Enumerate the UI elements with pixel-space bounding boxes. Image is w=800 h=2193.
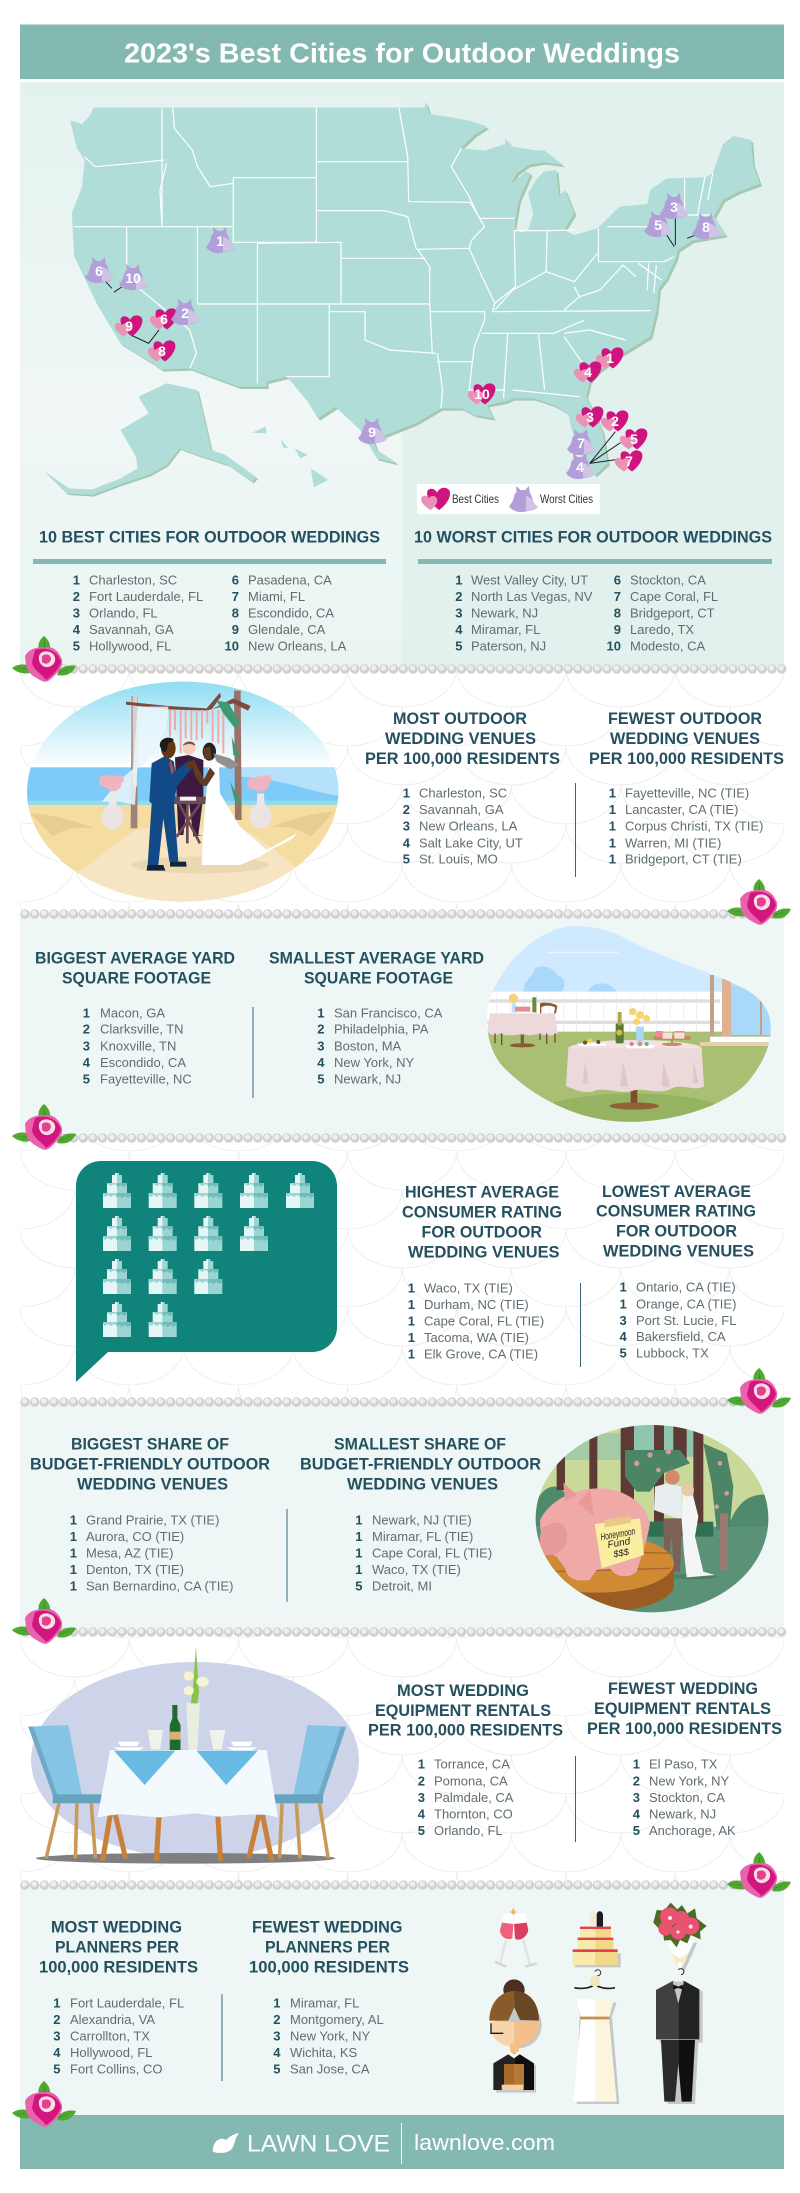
heading: most rentals: PER 100,000 RESIDENTS (368, 1722, 563, 1740)
list: highest rating: 1 (408, 1297, 415, 1312)
list: smallest budget share: 5 (355, 1579, 362, 1594)
map markers: best cities: 8 (158, 343, 166, 359)
list: 10 best cities: Orlando, FL (89, 606, 158, 621)
map markers: worst cities: 4 (576, 459, 584, 475)
list: 10 worst cities: North Las Vegas, NV (471, 589, 593, 604)
list: biggest yard: 1 (83, 1005, 90, 1020)
panel: yard section background (20, 914, 784, 1138)
list: most planners: Alexandria, VA (70, 2012, 155, 2027)
map markers: worst cities (85, 193, 721, 479)
list: smallest yard: New York, NY (334, 1055, 415, 1070)
heading: smallest yard (269, 949, 484, 987)
flower decoration 1 (12, 636, 76, 682)
list: most outdoor venues: 5 (403, 852, 410, 867)
map legend: Best Cities (452, 492, 499, 506)
heading: fewest planners (249, 1919, 409, 1977)
heading: fewest planners: FEWEST WEDDING (252, 1919, 402, 1937)
list: fewest rentals: Stockton, CA (649, 1790, 725, 1805)
connector lines (104, 217, 700, 463)
list: lowest rating: 3 (619, 1313, 627, 1328)
map markers: best cities: 1 (606, 350, 614, 366)
heading: smallest yard: SMALLEST AVERAGE YARD (269, 949, 484, 967)
list: biggest budget share: 1 (70, 1562, 77, 1577)
heading: smallest budget share: BUDGET-FRIENDLY OUTDOOR (300, 1456, 541, 1474)
icon: wedding cake (573, 1911, 621, 1967)
list: fewest planners: Miramar, FL (290, 1995, 359, 2010)
footer banner: lawnlove.com (414, 2130, 555, 2155)
list: most planners: Carrollton, TX (70, 2028, 150, 2043)
list: highest rating: Durham, NC (TIE) (424, 1297, 529, 1312)
list: fewest outdoor venues: 1 (609, 835, 616, 850)
list: most outdoor venues: 1 (403, 786, 410, 801)
icons: wedding planner items (489, 1903, 707, 2104)
heading: lowest rating: LOWEST AVERAGE (602, 1183, 751, 1201)
list: fewest planners: Wichita, KS (290, 2045, 358, 2060)
list: 10 worst cities: 7 (614, 589, 621, 604)
list: biggest yard: 4 (83, 1055, 91, 1070)
heading: fewest rentals (587, 1680, 782, 1738)
list: most outdoor venues: Savannah, GA (419, 802, 504, 817)
list: 10 worst cities: 3 (455, 606, 462, 621)
list: most outdoor venues: 4 (403, 835, 411, 850)
list: most outdoor venues: Charleston, SC (419, 786, 507, 801)
flower decoration 6 (727, 1852, 791, 1898)
map markers: worst cities: 1 (216, 233, 224, 249)
illustration: piggy bank honeymoon fund (536, 1425, 768, 1612)
heading: biggest budget share: WEDDING VENUES (77, 1475, 228, 1493)
heading: biggest budget share: BIGGEST SHARE OF (71, 1436, 229, 1454)
list: biggest budget share: Aurora, CO (TIE) (86, 1529, 184, 1544)
icon: wedding officiant (489, 1979, 542, 2093)
list: biggest yard: Clarksville, TN (100, 1022, 184, 1037)
list: 10 best cities: 5 (73, 639, 80, 654)
list: most rentals: Orlando, FL (434, 1823, 503, 1838)
list: most rentals (418, 1757, 514, 1838)
list: most outdoor venues: New Orleans, LA (419, 819, 518, 834)
map legend: Worst Cities (540, 492, 593, 506)
map markers: worst cities: 6 (95, 263, 103, 279)
list: lowest rating (580, 1280, 736, 1367)
list: 10 best cities: Hollywood, FL (89, 639, 171, 654)
list: fewest rentals: Anchorage, AK (649, 1823, 736, 1838)
heading: fewest planners: 100,000 RESIDENTS (249, 1959, 409, 1977)
heading: most outdoor venues: WEDDING VENUES (385, 730, 536, 748)
list: smallest yard: 1 (317, 1005, 324, 1020)
list: 10 worst cities: Miramar, FL (471, 622, 540, 637)
flower decoration 4 (727, 1368, 791, 1414)
list: smallest yard: Boston, MA (334, 1038, 402, 1053)
list: 10 best cities: Savannah, GA (89, 622, 174, 637)
heading: fewest rentals: EQUIPMENT RENTALS (594, 1700, 771, 1718)
list: lowest rating: 1 (619, 1296, 627, 1311)
list: 10 worst cities (455, 572, 718, 654)
list: fewest planners: 4 (273, 2045, 281, 2060)
list: smallest budget share: 1 (355, 1546, 362, 1561)
list: fewest outdoor venues: Lancaster, CA (TIE) (625, 802, 738, 817)
heading: lowest rating: FOR OUTDOOR (616, 1223, 737, 1241)
footer banner: LAWN LOVE (247, 2131, 390, 2158)
list: 10 worst cities: Newark, NJ (471, 606, 538, 621)
map markers: worst cities: 9 (368, 424, 376, 440)
list: 10 best cities: Fort Lauderdale, FL (89, 589, 203, 604)
list: 10 best cities: 10 (225, 639, 239, 654)
heading: biggest yard (35, 949, 235, 987)
list: smallest budget share: Newark, NJ (TIE) (372, 1512, 472, 1527)
list: smallest yard: San Francisco, CA (334, 1005, 443, 1020)
heading: fewest outdoor venues (589, 710, 784, 768)
list: biggest yard: 2 (83, 1022, 90, 1037)
heading: smallest budget share: WEDDING VENUES (347, 1475, 498, 1493)
list: smallest budget share: Waco, TX (TIE) (372, 1562, 461, 1577)
icon: champagne glasses (495, 1907, 537, 1967)
speech bubble with cake pictogram (76, 1161, 337, 1382)
list: 10 worst cities: 5 (455, 639, 462, 654)
map markers: worst cities: 2 (181, 305, 189, 321)
map markers: best cities (115, 308, 647, 472)
list: most planners: Fort Collins, CO (70, 2061, 162, 2076)
list: fewest planners: New York, NY (290, 2028, 371, 2043)
list: fewest outdoor venues: Warren, MI (TIE) (625, 835, 721, 850)
list: highest rating: 1 (408, 1347, 415, 1362)
illustration: piggy bank honeymoon fund: Honeymoon (600, 1526, 636, 1543)
list: highest rating: Tacoma, WA (TIE) (424, 1330, 529, 1345)
list: smallest yard: 3 (317, 1038, 324, 1053)
list: lowest rating: Port St. Lucie, FL (636, 1313, 736, 1328)
list: most outdoor venues: 3 (403, 819, 410, 834)
list: fewest rentals: El Paso, TX (649, 1757, 718, 1772)
heading: lowest rating (596, 1183, 756, 1261)
list: biggest yard: Macon, GA (100, 1005, 165, 1020)
panel: scallop background rentals (20, 1632, 784, 1885)
map markers: worst cities: 7 (577, 435, 585, 451)
title banner: 2023's Best Cities for Outdoor Weddings (124, 38, 680, 68)
flower decoration 3 (12, 1104, 76, 1150)
heading: smallest yard: SQUARE FOOTAGE (304, 969, 453, 987)
map markers: best cities: 4 (584, 364, 592, 380)
list: biggest budget share: Mesa, AZ (TIE) (86, 1546, 173, 1561)
list: lowest rating: Ontario, CA (TIE) (636, 1280, 736, 1295)
heading: lowest rating: WEDDING VENUES (603, 1243, 754, 1261)
heading: fewest outdoor venues: WEDDING VENUES (610, 730, 760, 748)
list: 10 best cities (73, 572, 347, 654)
list: smallest budget share: Detroit, MI (372, 1579, 432, 1594)
list: biggest yard (83, 1005, 192, 1086)
list: highest rating: 1 (408, 1280, 415, 1295)
list: biggest budget share: 1 (70, 1529, 77, 1544)
list: lowest rating: Bakersfield, CA (636, 1329, 726, 1344)
list: most outdoor venues: St. Louis, MO (419, 852, 498, 867)
map markers: best cities: 10 (474, 386, 490, 402)
list: fewest outdoor venues: 1 (609, 819, 616, 834)
list: lowest rating: 4 (619, 1329, 627, 1344)
list: lowest rating: 5 (619, 1346, 627, 1361)
map markers: worst cities: 5 (654, 217, 662, 233)
list: 10 best cities: Pasadena, CA (248, 572, 332, 587)
list: 10 worst cities: Modesto, CA (630, 639, 705, 654)
list: fewest rentals: 1 (633, 1757, 640, 1772)
list: most planners: 2 (53, 2012, 60, 2027)
heading: fewest outdoor venues: PER 100,000 RESIDENTS (589, 750, 784, 768)
list: highest rating: Waco, TX (TIE) (424, 1280, 513, 1295)
icon: bouquet (653, 1903, 707, 1973)
icon: wedding dress (573, 1970, 619, 2104)
map markers: best cities: 9 (125, 318, 133, 334)
list: most rentals: Thornton, CO (434, 1806, 513, 1821)
list: most outdoor venues: 2 (403, 802, 410, 817)
heading: biggest budget share: BUDGET-FRIENDLY OUTDOOR (30, 1456, 270, 1474)
list: smallest budget share (287, 1509, 492, 1602)
map markers: best cities: 3 (586, 409, 594, 425)
list: fewest outdoor venues: Bridgeport, CT (TIE) (625, 852, 742, 867)
list: smallest yard (253, 1005, 443, 1098)
list: fewest rentals: New York, NY (649, 1773, 730, 1788)
list: biggest budget share: 1 (70, 1546, 77, 1561)
list: lowest rating: 1 (619, 1280, 627, 1295)
panel: scallop background ratings (20, 1138, 784, 1402)
panel: map background (20, 82, 784, 669)
list: most outdoor venues: Salt Lake City, UT (419, 835, 523, 850)
panel: planners section background (20, 1885, 784, 2115)
list: 10 worst cities: 10 (607, 639, 621, 654)
list: most rentals: 2 (418, 1773, 425, 1788)
heading: highest rating: WEDDING VENUES (408, 1243, 560, 1261)
footer banner (20, 2115, 784, 2169)
list: 10 best cities: New Orleans, LA (248, 639, 347, 654)
list: lowest rating: Orange, CA (TIE) (636, 1296, 736, 1311)
list: fewest outdoor venues: 1 (609, 786, 616, 801)
heading: 10 best cities: 10 BEST CITIES FOR OUTDOOR WEDDINGS (39, 528, 380, 546)
list: most planners: Hollywood, FL (70, 2045, 152, 2060)
list: 10 best cities: Glendale, CA (248, 622, 326, 637)
list: lowest rating: Lubbock, TX (636, 1346, 709, 1361)
list: 10 worst cities: West Valley City, UT (471, 572, 588, 587)
list: highest rating: Cape Coral, FL (TIE) (424, 1314, 544, 1329)
list: biggest yard: Escondido, CA (100, 1055, 186, 1070)
list: 10 best cities: 9 (232, 622, 239, 637)
heading: 10 best cities (33, 528, 386, 564)
list: 10 worst cities: 9 (614, 622, 621, 637)
list: smallest budget share: 1 (355, 1512, 362, 1527)
list: biggest yard: Fayetteville, NC (100, 1071, 192, 1086)
illustration: wedding table with chairs (28, 1647, 359, 1864)
list: biggest budget share: 1 (70, 1579, 77, 1594)
list: highest rating: 1 (408, 1330, 415, 1345)
list: most rentals: 3 (418, 1790, 425, 1805)
list: highest rating: Elk Grove, CA (TIE) (424, 1347, 538, 1362)
list: biggest budget share: San Bernardino, CA (TIE) (86, 1579, 233, 1594)
heading: most rentals: EQUIPMENT RENTALS (375, 1702, 551, 1720)
list: biggest yard: Knoxville, TN (100, 1038, 176, 1053)
list: most planners (53, 1995, 184, 2076)
list: smallest yard: 4 (317, 1055, 325, 1070)
list: fewest planners: 5 (273, 2061, 280, 2076)
illustration: piggy bank honeymoon fund: Fund (607, 1536, 631, 1551)
list: smallest yard: Philadelphia, PA (334, 1022, 429, 1037)
list: fewest rentals: 2 (633, 1773, 640, 1788)
heading: most outdoor venues: PER 100,000 RESIDENTS (365, 750, 560, 768)
list: smallest budget share: 1 (355, 1562, 362, 1577)
list: biggest yard: 5 (83, 1071, 90, 1086)
list: most rentals: Torrance, CA (434, 1757, 510, 1772)
list: biggest budget share (70, 1512, 233, 1594)
list: 10 worst cities: 6 (614, 572, 621, 587)
heading: 10 worst cities (414, 528, 772, 564)
list: biggest budget share: 1 (70, 1512, 77, 1527)
list: fewest planners: 1 (273, 1995, 280, 2010)
list: 10 worst cities: Stockton, CA (630, 572, 706, 587)
list: fewest outdoor venues: 1 (609, 852, 616, 867)
illustration: beach wedding ceremony (20, 680, 350, 907)
list: fewest rentals: 4 (633, 1806, 641, 1821)
illustration: backyard reception (487, 926, 771, 1122)
list: 10 best cities: 3 (73, 606, 80, 621)
map markers: worst cities: 8 (702, 219, 710, 235)
list: biggest budget share: Grand Prairie, TX (TIE) (86, 1512, 219, 1527)
icon: tuxedo (656, 1969, 703, 2104)
flower decoration 7 (12, 2081, 76, 2127)
list: most planners: Fort Lauderdale, FL (70, 1995, 184, 2010)
list: fewest planners (222, 1994, 384, 2081)
map markers: best cities: 7 (625, 453, 633, 469)
list: 10 best cities: 4 (73, 622, 81, 637)
heading: most planners: MOST WEDDING (51, 1919, 182, 1937)
heading: highest rating (402, 1184, 562, 1261)
list: 10 worst cities: 1 (455, 572, 462, 587)
heading: most planners: PLANNERS PER (55, 1939, 179, 1957)
heading: most outdoor venues: MOST OUTDOOR (393, 710, 527, 728)
heading: 10 worst cities: 10 WORST CITIES FOR OUTDOOR WEDDINGS (414, 528, 772, 546)
list: fewest outdoor venues (576, 783, 763, 877)
heading: fewest planners: PLANNERS PER (265, 1939, 390, 1957)
list: highest rating: 1 (408, 1314, 415, 1329)
heading: smallest budget share (300, 1436, 541, 1493)
list: most planners: 3 (53, 2028, 60, 2043)
list: smallest yard: Newark, NJ (334, 1071, 401, 1086)
list: 10 worst cities: Cape Coral, FL (630, 589, 718, 604)
pearl string dividers (24, 668, 784, 1885)
list: 10 worst cities: 4 (455, 622, 463, 637)
heading: most planners (39, 1919, 198, 1977)
list: 10 worst cities: Bridgeport, CT (630, 606, 715, 621)
list: 10 best cities: Miami, FL (248, 589, 305, 604)
heading: highest rating: FOR OUTDOOR (422, 1223, 542, 1241)
title banner (20, 24, 784, 79)
list: fewest rentals: 3 (633, 1790, 640, 1805)
flower decoration 5 (12, 1598, 76, 1644)
list: smallest yard: 2 (317, 1022, 324, 1037)
list: 10 best cities: 6 (232, 572, 239, 587)
list: smallest budget share: Cape Coral, FL (TIE) (372, 1546, 492, 1561)
list: fewest planners: San Jose, CA (290, 2061, 370, 2076)
list: smallest yard: 5 (317, 1071, 324, 1086)
panel: budget section background (20, 1402, 784, 1632)
heading: fewest outdoor venues: FEWEST OUTDOOR (608, 710, 762, 728)
list: most rentals: 5 (418, 1823, 425, 1838)
list: most rentals: 4 (418, 1806, 426, 1821)
list: fewest outdoor venues: Fayetteville, NC (TIE) (625, 786, 749, 801)
list: most planners: 5 (53, 2061, 60, 2076)
heading: smallest budget share: SMALLEST SHARE OF (334, 1436, 506, 1454)
list: 10 worst cities: Paterson, NJ (471, 639, 546, 654)
list: most rentals: Palmdale, CA (434, 1790, 514, 1805)
flower decoration 2 (727, 879, 791, 925)
heading: most planners: 100,000 RESIDENTS (39, 1959, 198, 1977)
heading: most outdoor venues (365, 710, 560, 768)
list: fewest outdoor venues: 1 (609, 802, 616, 817)
list: 10 best cities: 7 (232, 589, 239, 604)
panel: scallop background venues (20, 669, 784, 914)
list: 10 best cities: 1 (73, 572, 80, 587)
list: fewest planners: 3 (273, 2028, 280, 2043)
map markers: worst cities: 10 (125, 270, 141, 286)
heading: biggest yard: BIGGEST AVERAGE YARD (35, 949, 235, 967)
map markers: worst cities: 3 (670, 199, 678, 215)
list: most planners: 1 (53, 1995, 60, 2010)
heading: lowest rating: CONSUMER RATING (596, 1203, 756, 1221)
list: most planners: 4 (53, 2045, 61, 2060)
list: 10 best cities: Escondido, CA (248, 606, 334, 621)
map of the United States (44, 102, 762, 497)
icon: lawn love leaf (213, 2133, 239, 2153)
list: fewest planners: 2 (273, 2012, 280, 2027)
heading: highest rating: HIGHEST AVERAGE (405, 1184, 559, 1202)
heading: fewest rentals: PER 100,000 RESIDENTS (587, 1720, 782, 1738)
list: biggest yard: 3 (83, 1038, 90, 1053)
illustration: piggy bank honeymoon fund: $$$ (612, 1547, 630, 1559)
list: fewest rentals: Newark, NJ (649, 1806, 716, 1821)
list: 10 worst cities: 2 (455, 589, 462, 604)
map markers: best cities: 2 (611, 413, 619, 429)
list: 10 worst cities: Laredo, TX (630, 622, 694, 637)
list: fewest rentals: 5 (633, 1823, 640, 1838)
list: 10 best cities: 8 (232, 606, 239, 621)
list: 10 worst cities: 8 (614, 606, 621, 621)
list: most outdoor venues (403, 786, 523, 867)
list: smallest budget share: Miramar, FL (TIE) (372, 1529, 473, 1544)
list: fewest outdoor venues: Corpus Christi, TX (TIE) (625, 819, 763, 834)
map legend (417, 484, 600, 514)
list: fewest planners: Montgomery, AL (290, 2012, 384, 2027)
list: most rentals: Pomona, CA (434, 1773, 508, 1788)
heading: fewest rentals: FEWEST WEDDING (608, 1680, 758, 1698)
heading: most rentals: MOST WEDDING (397, 1682, 529, 1700)
heading: highest rating: CONSUMER RATING (402, 1204, 562, 1222)
list: smallest budget share: 1 (355, 1529, 362, 1544)
list: highest rating (408, 1280, 544, 1362)
map markers: best cities: 6 (160, 311, 168, 327)
heading: most rentals (368, 1682, 563, 1740)
list: fewest rentals (576, 1756, 736, 1842)
list: most rentals: 1 (418, 1757, 425, 1772)
list: 10 best cities: 2 (73, 589, 80, 604)
heading: biggest budget share (30, 1436, 270, 1493)
list: 10 best cities: Charleston, SC (89, 572, 177, 587)
map markers: best cities: 5 (630, 431, 638, 447)
list: biggest budget share: Denton, TX (TIE) (86, 1562, 184, 1577)
heading: biggest yard: SQUARE FOOTAGE (62, 969, 211, 987)
